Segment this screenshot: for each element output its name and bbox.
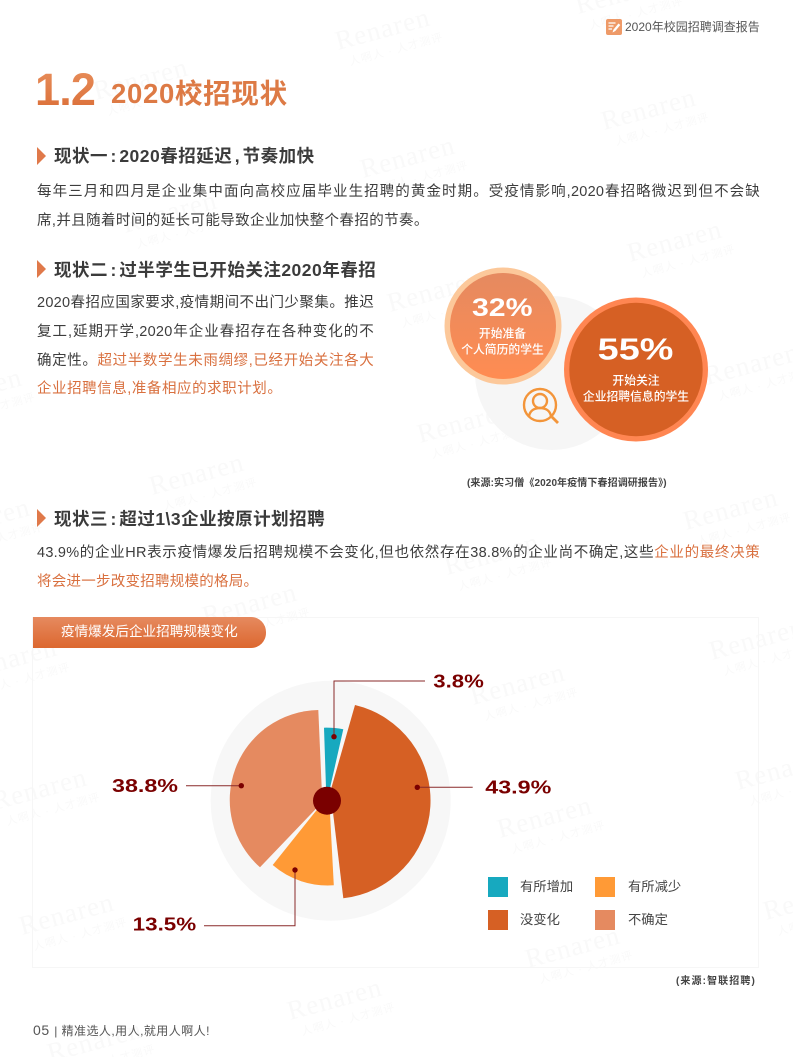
chart title banner: 疫情爆发后企业招聘规模变化 (61, 624, 238, 639)
body text: status two: 复工,延期开学,2020年企业春招存在各种变化的不 (37, 324, 374, 340)
icon: report header pen (606, 19, 622, 35)
legend item: increase (488, 877, 573, 897)
icon: magnifier with person (524, 389, 558, 423)
bubble: 32%: 32% (472, 295, 533, 322)
legend item: increase: 有所增加 (520, 879, 573, 894)
title: 2020校招现状 (111, 78, 288, 109)
arrow marker (37, 509, 46, 527)
footer: 05 | 精准选人,用人,就用人啊人! (33, 1022, 210, 1038)
legend item: decrease (595, 877, 681, 897)
center hub (313, 787, 341, 815)
slice: uncertain 38.8% (230, 710, 322, 867)
body text: status two: 确定性。超过半数学生未雨绸缪,已经开始关注各大 (37, 353, 374, 369)
callout: 13.5% (133, 867, 298, 934)
legend item: decrease: 有所减少 (628, 879, 681, 894)
legend item: no change (488, 910, 560, 930)
body text: status two (37, 294, 374, 397)
bubble: 32%: 开始准备 (479, 326, 526, 340)
slice: increase 3.8% (324, 728, 343, 788)
bubble chart: student attention (444, 268, 708, 450)
legend (488, 877, 681, 930)
legend item: uncertain: 不确定 (628, 912, 668, 927)
source note: pie chart: (来源:智联招聘) (676, 976, 756, 987)
body text: status two: 企业招聘信息,准备相应的求职计划。 (37, 381, 282, 397)
chart panel frame (32, 617, 759, 968)
body text: status three (37, 544, 760, 590)
callout: 43.9%: 43.9% (485, 776, 551, 798)
body text: status three: 将会进一步改变招聘规模的格局。 (37, 574, 258, 590)
section number title: 1.2 (35, 64, 95, 115)
bubble: 55% (564, 298, 708, 442)
bubble: 32% (444, 268, 562, 384)
chart title banner (33, 617, 266, 648)
callout: 38.8%: 38.8% (112, 775, 178, 796)
heading: status two: 现状二:过半学生已开始关注2020年春招 (54, 260, 376, 280)
bubble: 55%: 企业招聘信息的学生 (583, 390, 689, 404)
callout: 13.5%: 13.5% (133, 914, 196, 934)
legend item: no change: 没变化 (520, 912, 560, 927)
heading: status three: 现状三:超过1\3企业按原计划招聘 (54, 509, 325, 529)
callout: 38.8% (112, 775, 244, 796)
body text: status one: 每年三月和四月是企业集中面向高校应届毕业生招聘的黄金时期。受疫情影响,2020春招略微迟到但不会缺 (37, 184, 760, 200)
bubble: 55%: 开始关注 (612, 374, 660, 388)
callout: 3.8%: 3.8% (433, 670, 484, 691)
arrow marker (37, 260, 46, 278)
slice: no change 43.9% (332, 705, 431, 898)
callout: 43.9% (415, 776, 551, 798)
body text: status one (37, 183, 760, 229)
body text: status three: 43.9%的企业HR表示疫情爆发后招聘规模不会变化,但也依然存在38.8%的企业尚不确定,这些企业的最终决策 (37, 545, 760, 561)
bubble: 32%: 个人简历的学生 (461, 342, 544, 356)
legend item: uncertain (595, 910, 668, 930)
slice: decrease 13.5% (273, 810, 334, 886)
callout: 3.8% (331, 670, 484, 739)
body text: status one: 席,并且随着时间的延长可能导致企业加快整个春招的节奏。 (37, 213, 429, 229)
heading: status one: 现状一:2020春招延迟,节奏加快 (54, 146, 315, 166)
source note: bubble chart: (来源:实习僧《2020年疫情下春招调研报告》) (467, 478, 667, 489)
body text: status two: 2020春招应国家要求,疫情期间不出门少聚集。推迟 (37, 295, 374, 311)
arrow marker (37, 147, 46, 165)
report header text: 2020年校园招聘调查报告 (625, 20, 760, 34)
bubble: 55%: 55% (598, 332, 673, 366)
